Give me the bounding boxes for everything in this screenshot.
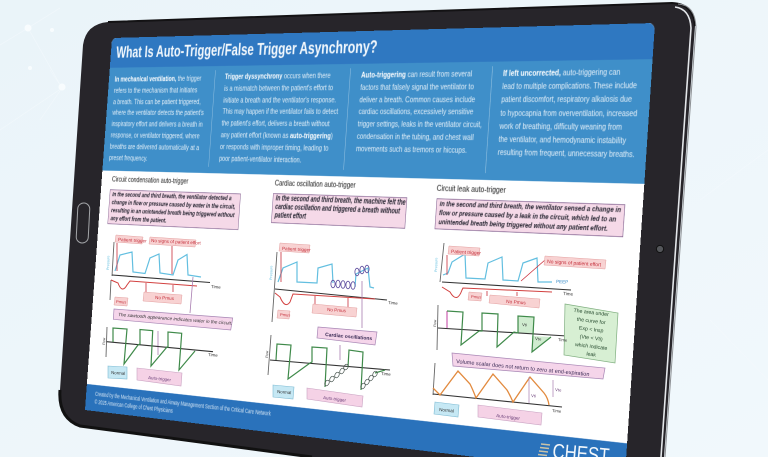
chart labels: cardiac oscillation (red): Patient trigger [282,246,311,253]
callout: leak note: the curve for [576,317,606,326]
chart labels: circuit leak (red): No signs of patient effort [547,259,602,268]
text: if left uncorrected: the ventilator, and hemodynamic instability [498,135,626,146]
chart labels: circuit leak: Auto-trigger [496,413,521,421]
text: mechanical ventilation [109,75,204,163]
chart labels: circuit leak: Time [563,291,574,297]
text: trigger dyssynchrony: any patient effort (known as auto-triggering) [221,131,333,141]
text: mechanical ventilation: refers to the mechanism that initiates [114,86,198,95]
chart labels: cardiac oscillation: Time [381,371,391,377]
chart labels: circuit leak: Time [558,337,568,343]
callout: circuit condensation [107,189,241,230]
chart labels: circuit condensation: Pressure [106,256,111,270]
footer: © 2025 American College of Chest Physicians [94,398,173,414]
heading: cardiac oscillation: Cardiac oscillation auto-trigger [275,179,356,190]
chart labels: circuit condensation: Auto-trigger [148,375,172,382]
chart labels: circuit leak: Volume scalar does not return to zero at end-expiration [456,359,590,378]
chart: circuit condensation [106,235,233,386]
text: mechanical ventilation: preset frequency. [109,154,148,163]
footer [85,384,627,457]
callout: circuit leak: In the second and third breath, the ventilator sensed a change in [439,200,621,215]
footer: Created by the Mechanical Ventilation and Airway Management Section of the Critical Care Network [95,390,271,417]
chart labels: circuit leak: Vte [535,336,542,341]
text: mechanical ventilation: breaths are delivered automatically at a [110,143,199,152]
text: auto-triggering causes: condensation in the tubing, and chest wall [357,132,474,142]
callout: leak note: The area under [573,308,609,318]
chart labels: circuit condensation (red) [116,237,202,305]
chart labels: cardiac oscillation (red) [280,246,347,318]
callout: cardiac oscillation: cardiac oscillation and triggered a breath without [275,203,400,216]
heading: circuit leak: Circuit leak auto-trigger [436,184,506,195]
text: if left uncorrected: resulting from frequent, unnecessary breaths. [497,148,635,160]
callout: leak note: which indicate [575,342,608,352]
icon: home button [76,203,90,243]
panel: introduction columns [102,59,653,184]
callout: circuit condensation: any effort from the patient. [110,215,167,225]
title: What Is Auto-Trigger/False Trigger Asynchrony? [116,37,378,61]
chart labels: circuit leak [433,258,590,421]
chart labels: cardiac oscillation: Auto-trigger [323,395,347,403]
chart labels: cardiac oscillation (red): Pmus [280,312,290,318]
chart labels: circuit leak (red) [451,249,602,306]
callout: leak note [573,308,609,359]
chart labels: circuit condensation: Time [211,284,221,290]
callout: leak note: Exp < Insp [579,326,604,335]
title [110,23,655,68]
infographic screen [85,23,655,457]
chart labels: circuit leak: Vti [531,393,536,398]
text: if left uncorrected [497,68,638,160]
chart labels: circuit leak: Pressure [434,258,439,272]
chart labels: circuit leak: Normal [439,407,454,414]
text: if left uncorrected: work of breathing, difficulty weaning from [499,122,622,132]
callout: circuit leak: flow or pressure caused by a leak in the circuit, which led to an [439,209,617,224]
chart: circuit leak [433,243,618,425]
text: trigger dyssynchrony: or responds with improper timing, leading to [220,143,329,153]
chart labels: cardiac oscillation: Normal [277,389,291,395]
callout: cardiac oscillation: In the second and third breath, the machine felt the [276,195,406,207]
text: auto-triggering causes: movements such as tremors or hiccups. [356,144,467,155]
text: if left uncorrected: to hypocapnia from overventilation, increased [500,109,638,118]
chart labels: circuit leak: Vte [555,387,562,393]
callout: cardiac oscillation: patient effort [274,212,306,221]
text: trigger dyssynchrony: This may happen if the ventilator fails to detect [222,108,338,116]
text: mechanical ventilation: In mechanical ventilation, the trigger [115,75,202,84]
chart labels: circuit condensation: Time [208,352,218,358]
chart labels: circuit condensation (red): Pmus [116,299,126,305]
chart labels: circuit leak (red): No Pmus [506,299,527,306]
callout: circuit condensation: resulting in an unintended breath being triggered without [111,207,235,219]
callout: cardiac oscillation [271,193,407,229]
chart labels: cardiac oscillation: Cardiac oscillations [325,332,373,342]
text: auto-triggering causes [356,70,482,155]
chart labels: circuit leak: Time [552,408,562,414]
chart labels: circuit condensation (red): No signs of patient effort [151,238,202,246]
chart labels: circuit condensation [102,256,232,382]
text: auto-triggering causes: trigger settings, leaks in the ventilator circuit, [357,120,482,130]
chart labels: circuit leak: Flow [433,319,437,327]
chart labels: cardiac oscillation: Flow [265,350,269,358]
chart labels: circuit leak: PEEP [556,279,568,284]
callout: circuit condensation: In the second and third breath, the ventilator detected a [112,191,232,202]
chart labels: circuit condensation: Normal [111,370,125,376]
chart labels: circuit leak (red): Patient trigger [451,249,481,257]
chart labels: cardiac oscillation [265,266,398,403]
callout: leak note: leak [586,351,597,359]
text: auto-triggering causes: deliver a breath. Common causes include [359,95,476,104]
chart labels: circuit condensation: Flow [102,337,106,345]
callout: circuit leak [435,198,625,237]
text: mechanical ventilation: a breath. This can be patient triggered, [113,98,201,106]
text: if left uncorrected: lead to multiple complications. These include [502,81,637,92]
icon: camera [656,245,664,253]
text: mechanical ventilation: inspiratory effort and delivers a breath in [111,120,203,129]
callout: circuit leak: unintended breath being triggered without any patient effort. [438,218,608,233]
chart labels: circuit leak (red): Pmus [471,294,481,300]
callout: circuit condensation: change in flow or pressure caused by water in the circuit, [111,199,236,211]
heading: circuit condensation: Circuit condensation auto-trigger [112,175,189,186]
chart labels: circuit condensation (red): No Pmus [155,295,175,301]
text: mechanical ventilation: response, or ventilator triggered, where [110,131,200,140]
text: trigger dyssynchrony: is a mismatch between the patient's effort to [224,84,333,93]
chart labels: circuit condensation (red): Patient trigger [118,237,147,244]
text: auto-triggering causes: factors that falsely signal the ventilator to [360,82,474,92]
chart labels: circuit leak: Vti [522,322,527,327]
text: if left uncorrected: If left uncorrected, auto-triggering can [503,68,621,78]
text: auto-triggering causes: cardiac oscillations, excessively sensitive [358,108,474,117]
chart: cardiac oscillation [268,243,390,407]
chart labels: circuit condensation: The sawtooth appearance indicates water in the circuit. [118,312,232,326]
text: mechanical ventilation: where the ventilator detects the patient's [112,109,204,117]
chart labels: cardiac oscillation: Pressure [269,266,274,280]
text: trigger dyssynchrony [219,71,338,164]
text: trigger dyssynchrony: Trigger dyssynchrony occurs when there [225,71,331,81]
text: trigger dyssynchrony: the patient's effort, delivers a breath without [221,119,330,129]
chart labels: cardiac oscillation: Time [388,300,398,306]
chart labels: cardiac oscillation (red): No Pmus [327,307,347,313]
callout: leak note: (Vte < Vti) [579,334,603,343]
text: trigger dyssynchrony: initiate a breath and the ventilator's response. [223,96,337,104]
text: trigger dyssynchrony: poor patient-ventilator interaction. [219,154,302,164]
text: auto-triggering causes: Auto-triggering can result from several [361,70,473,80]
text: if left uncorrected: patient discomfort, respiratory alkalosis due [501,95,632,105]
